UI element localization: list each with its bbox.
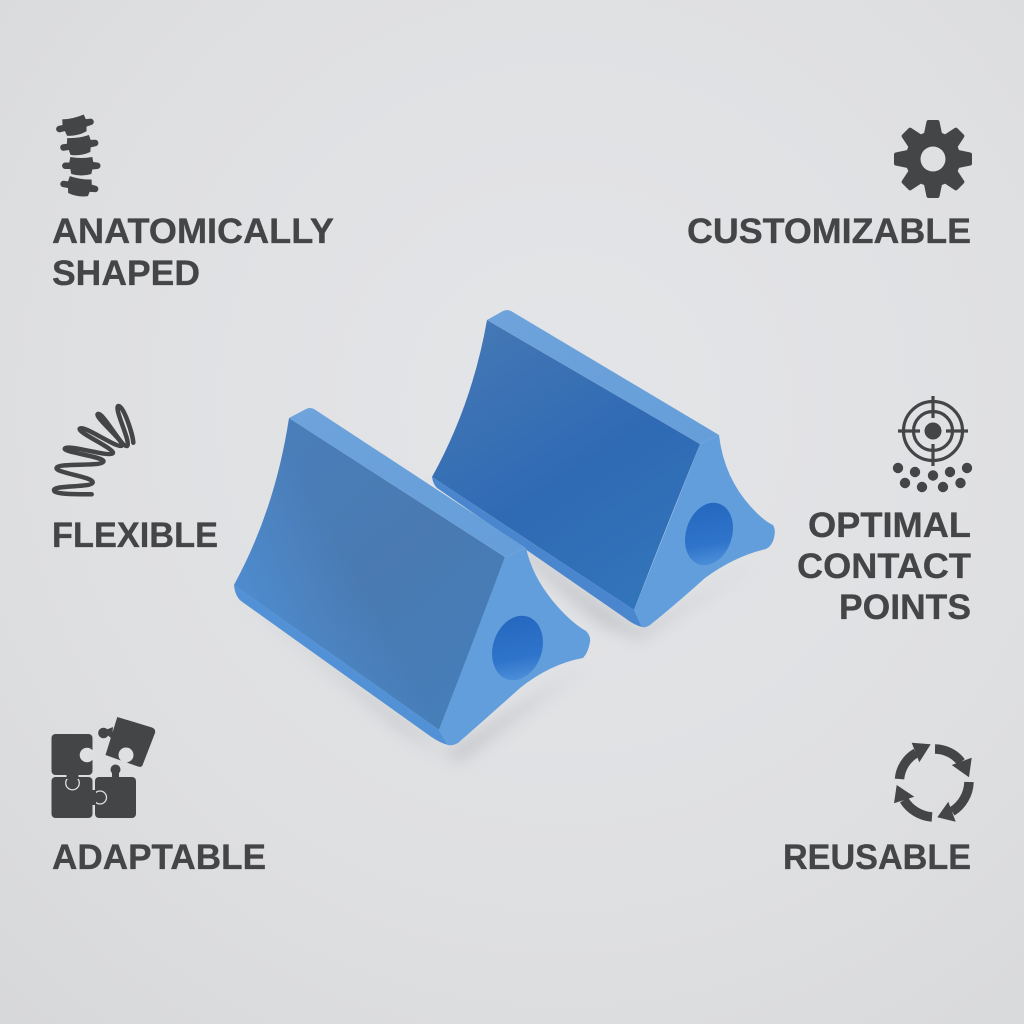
label: optimal contact points: OPTIMAL	[808, 506, 971, 545]
left block top face	[289, 408, 526, 557]
left block	[234, 408, 590, 745]
left block hole	[484, 609, 551, 687]
feature: reusable	[783, 743, 972, 877]
label: customizable: CUSTOMIZABLE	[687, 212, 971, 251]
icon: circular arrows	[894, 743, 972, 822]
right block hole	[677, 496, 741, 572]
label: optimal contact points	[797, 506, 971, 627]
label: adaptable: ADAPTABLE	[52, 838, 266, 877]
feature: anatomically shaped	[52, 113, 334, 293]
right block	[432, 310, 775, 627]
icon: gear	[894, 120, 972, 198]
feature: adaptable	[52, 717, 266, 877]
label: flexible: FLEXIBLE	[52, 516, 218, 555]
feature: flexible	[52, 406, 218, 555]
product: pair of blue wedge blocks	[234, 310, 775, 762]
right block main face	[432, 320, 700, 610]
label: optimal contact points: CONTACT	[797, 547, 971, 586]
label: anatomically shaped: SHAPED	[52, 254, 200, 293]
right block lower lip	[432, 477, 642, 627]
icon: spring	[54, 406, 133, 494]
label: anatomically shaped: ANATOMICALLY	[52, 212, 334, 251]
right block top face	[487, 310, 719, 444]
icon: puzzle pieces	[52, 717, 155, 818]
icon: spine	[54, 113, 101, 199]
icon: target with contact dots	[893, 396, 972, 492]
left block main face light area	[234, 418, 505, 730]
label: anatomically shaped	[52, 212, 334, 293]
feature: optimal contact points	[797, 396, 972, 627]
right block end face	[634, 435, 775, 627]
feature: customizable	[687, 120, 972, 251]
label: reusable: REUSABLE	[783, 838, 971, 877]
label: optimal contact points: POINTS	[839, 588, 971, 627]
left block main face	[234, 418, 505, 730]
left block end face	[439, 548, 590, 745]
floor shadows	[236, 480, 760, 762]
left block lower lip	[234, 585, 448, 745]
